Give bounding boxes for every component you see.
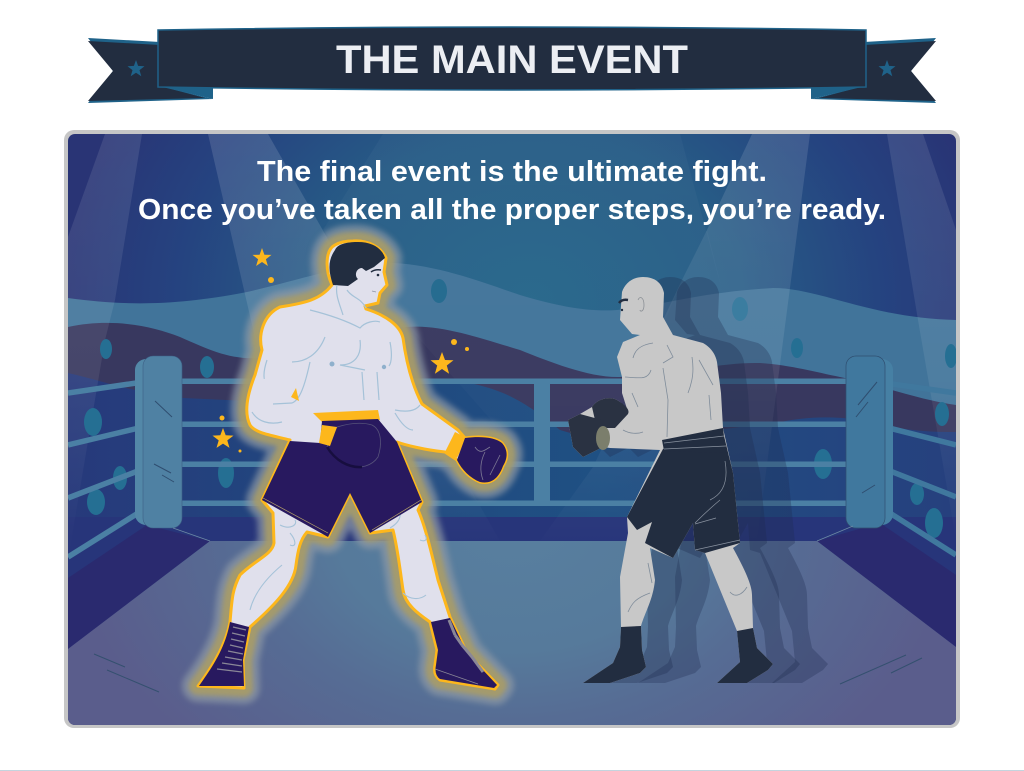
corner post left	[135, 356, 182, 528]
figure: opponent	[568, 277, 773, 683]
icon: star top left of hero	[252, 248, 272, 266]
floor side: left apron	[68, 525, 210, 649]
banner left tail	[88, 38, 213, 103]
opponent gloves	[592, 398, 629, 428]
text: intro sentence	[138, 156, 886, 226]
icon: right star	[878, 60, 896, 76]
icon: dot	[238, 450, 242, 452]
hero belt	[313, 410, 380, 422]
icon: dot	[220, 416, 224, 420]
hero muscle lines	[252, 285, 420, 430]
hero body	[198, 241, 507, 689]
banner centre	[158, 27, 866, 90]
ropes left side	[68, 382, 143, 557]
title: THE MAIN EVENT	[336, 38, 688, 82]
opponent muscle lines	[623, 343, 747, 612]
wave: light crowd band	[68, 264, 956, 405]
hero hair	[329, 242, 385, 286]
hero back glove	[457, 437, 507, 482]
figure: opponent fading shadows	[595, 277, 828, 683]
floor side: right apron	[817, 523, 956, 647]
hero boots	[199, 622, 249, 686]
text: intro sentence: The final event is the ultimate fight.	[257, 156, 767, 188]
icon: dot	[451, 339, 457, 345]
title banner	[88, 27, 936, 103]
opponent boots	[583, 626, 646, 683]
ring floor	[68, 541, 956, 725]
apron band	[68, 517, 956, 560]
icon: star right of hero	[430, 352, 454, 374]
icon: left star	[128, 60, 144, 76]
panel: boxing ring scene	[64, 130, 960, 728]
opponent shorts	[627, 436, 740, 558]
hero wrist wrap front	[319, 425, 337, 446]
icon: dot	[465, 347, 469, 351]
wave: dark crowd band	[68, 322, 956, 433]
opponent belt	[662, 428, 724, 449]
floor scratches	[94, 526, 922, 692]
hero front glove	[327, 423, 380, 467]
hero wrist wrap back	[446, 432, 464, 458]
opponent wrist wrap	[596, 426, 610, 450]
corner post right	[846, 356, 893, 528]
hero shorts	[262, 419, 422, 537]
figure: hero boxer with glow	[198, 241, 507, 689]
banner right tail	[811, 38, 936, 103]
ring ropes back	[182, 378, 847, 506]
bottom edge line	[0, 770, 1024, 771]
wave: lower blue band	[68, 373, 956, 517]
text: intro sentence: Once you’ve taken all the proper steps, you’re ready.	[138, 194, 886, 226]
hero face details	[371, 270, 381, 272]
crowd spots	[84, 279, 957, 538]
arena backdrop	[68, 134, 956, 725]
spotlight beams	[68, 134, 956, 480]
hero glow	[198, 241, 507, 689]
icon: dot	[268, 277, 274, 283]
icon: star left of hero	[212, 428, 234, 448]
ropes right side	[892, 386, 956, 558]
